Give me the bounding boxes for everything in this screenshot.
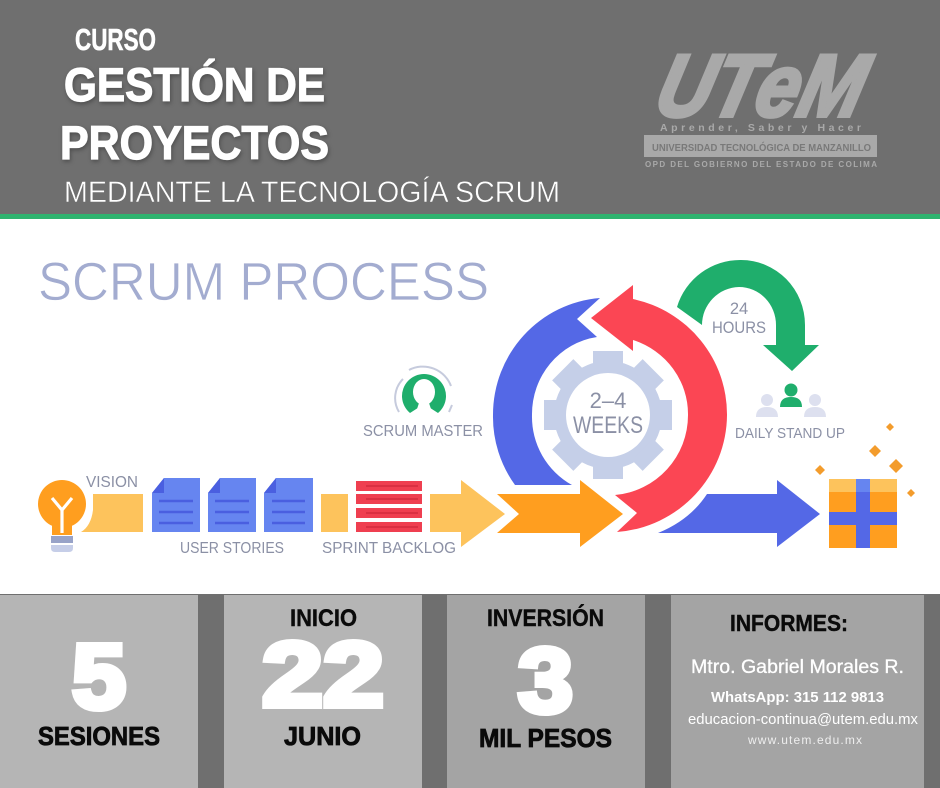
- panel: investment: [447, 595, 645, 788]
- heading: informes: INFORMES:: [730, 610, 848, 636]
- label: sesiones: SESIONES: [38, 721, 160, 751]
- arrow: orange: [497, 480, 623, 547]
- panel: start date: [224, 595, 422, 788]
- label: 24 hours: HOURS: [712, 319, 766, 337]
- vision bar: [81, 494, 143, 532]
- course title: GESTIÓN DE: [64, 58, 325, 111]
- sprint backlog list: [356, 481, 422, 532]
- contact name: Mtro. Gabriel Morales R.: [691, 657, 904, 678]
- sprint bar: [321, 494, 348, 532]
- arrow: green daily loop: [677, 260, 819, 371]
- label: sprint backlog: SPRINT BACKLOG: [322, 540, 456, 557]
- panel: contact information: [671, 595, 924, 788]
- gear label: WEEKS: [573, 412, 643, 439]
- gear label: [573, 388, 643, 439]
- contact whatsapp: WhatsApp: 315 112 9813: [711, 689, 884, 706]
- label: user stories: USER STORIES: [180, 540, 284, 557]
- course label: CURSO: [75, 22, 156, 57]
- icon: daily stand up team: [756, 384, 826, 417]
- UTeM logo: OPD DEL GOBIERNO DEL ESTADO DE COLIMA: [645, 160, 877, 169]
- heading: scrum process: SCRUM PROCESS: [38, 252, 489, 312]
- label: inicio: INICIO: [290, 605, 357, 632]
- UTeM logo: UNIVERSIDAD TECNOLÓGICA DE MANZANILLO: [652, 141, 871, 154]
- number: 5: 5: [72, 626, 126, 728]
- panel: sessions: [0, 595, 198, 788]
- arrow: light orange: [430, 480, 505, 547]
- footer background: [0, 594, 940, 788]
- gear label: 2–4: [590, 388, 626, 413]
- label: scrum master: SCRUM MASTER: [363, 423, 483, 440]
- UTeM logo: Aprender, Saber y Hacer: [660, 122, 861, 134]
- icon: product gift box: [829, 479, 897, 548]
- icon: scrum master: [395, 367, 452, 413]
- label: mil pesos: MIL PESOS: [479, 723, 612, 753]
- label: 24 hours: [712, 300, 766, 337]
- icon: light bulb: [38, 480, 86, 552]
- label: vision: VISION: [86, 474, 138, 491]
- header panel: [0, 0, 940, 219]
- UTeM logo: UTeM: [647, 36, 879, 135]
- course title: [60, 58, 329, 169]
- sparkles: [815, 423, 915, 497]
- label: 24 hours: 24: [730, 300, 748, 318]
- course subtitle: MEDIANTE LA TECNOLOGÍA SCRUM: [64, 176, 560, 209]
- number: 22: 22: [262, 624, 384, 726]
- number: 3: 3: [518, 630, 573, 732]
- contact website: www.utem.edu.mx: [747, 733, 862, 747]
- course title: PROYECTOS: [60, 116, 329, 169]
- label: junio: JUNIO: [284, 721, 361, 751]
- contact email: educacion-continua@utem.edu.mx: [688, 711, 918, 728]
- label: daily stand up: DAILY STAND UP: [735, 425, 845, 442]
- user story documents: [152, 478, 313, 532]
- arrow: blue to product: [658, 480, 820, 547]
- arrow: blue sprint loop: [493, 298, 600, 485]
- label: inversion: INVERSIÓN: [487, 604, 604, 632]
- arrow: red sprint loop: [591, 285, 727, 532]
- scrum diagram: [38, 260, 915, 557]
- icon: gear: [544, 351, 672, 479]
- UTeM logo: [644, 36, 879, 169]
